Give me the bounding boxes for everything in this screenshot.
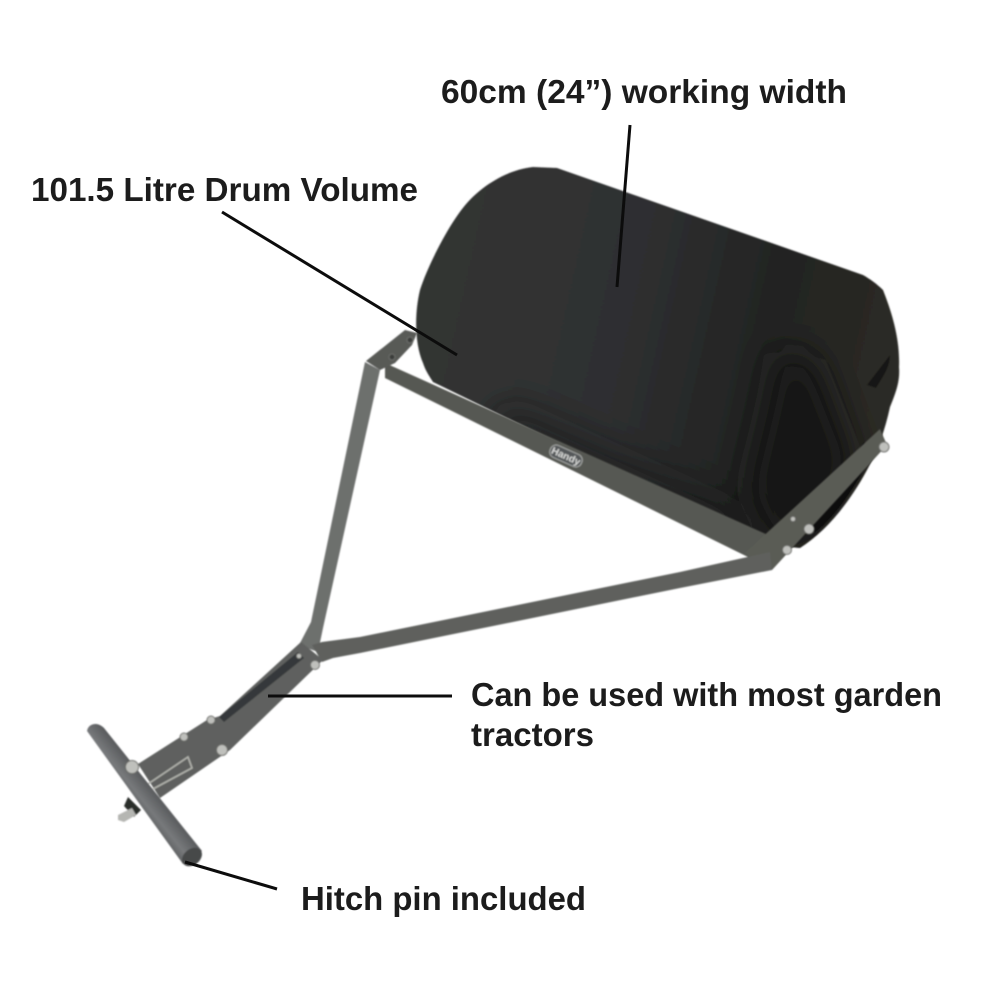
callout: hitch pin xyxy=(185,862,586,917)
frame: left arm xyxy=(299,362,380,652)
callout: drum volume: 101.5 Litre Drum Volume xyxy=(31,171,418,208)
frame: right drum bracket xyxy=(745,429,887,570)
callout: garden tractors: Can be used with most garden xyxy=(471,676,942,713)
callout: drum volume xyxy=(31,171,457,355)
frame: right arm xyxy=(312,552,772,662)
frame: tongue slot xyxy=(219,652,304,722)
wing nut xyxy=(118,797,141,822)
callout: garden tractors: tractors xyxy=(471,716,594,753)
end-cap recess xyxy=(867,355,890,388)
callout: hitch pin: Hitch pin included xyxy=(301,880,586,917)
bolts xyxy=(126,337,889,774)
roller drum xyxy=(416,167,899,548)
roller frame xyxy=(87,330,889,870)
frame: left drum bracket xyxy=(366,330,417,370)
hitch bracket outline xyxy=(148,757,192,789)
frame: front bar xyxy=(385,363,768,558)
callout: working width: 60cm (24”) working width xyxy=(441,73,847,110)
brand badge: Handy xyxy=(549,446,582,468)
T-bar hitch xyxy=(87,724,206,870)
frame: tongue xyxy=(138,642,323,798)
callout: working width xyxy=(441,73,847,287)
lawn roller infographic xyxy=(33,79,940,917)
callout: garden tractors xyxy=(268,676,942,753)
